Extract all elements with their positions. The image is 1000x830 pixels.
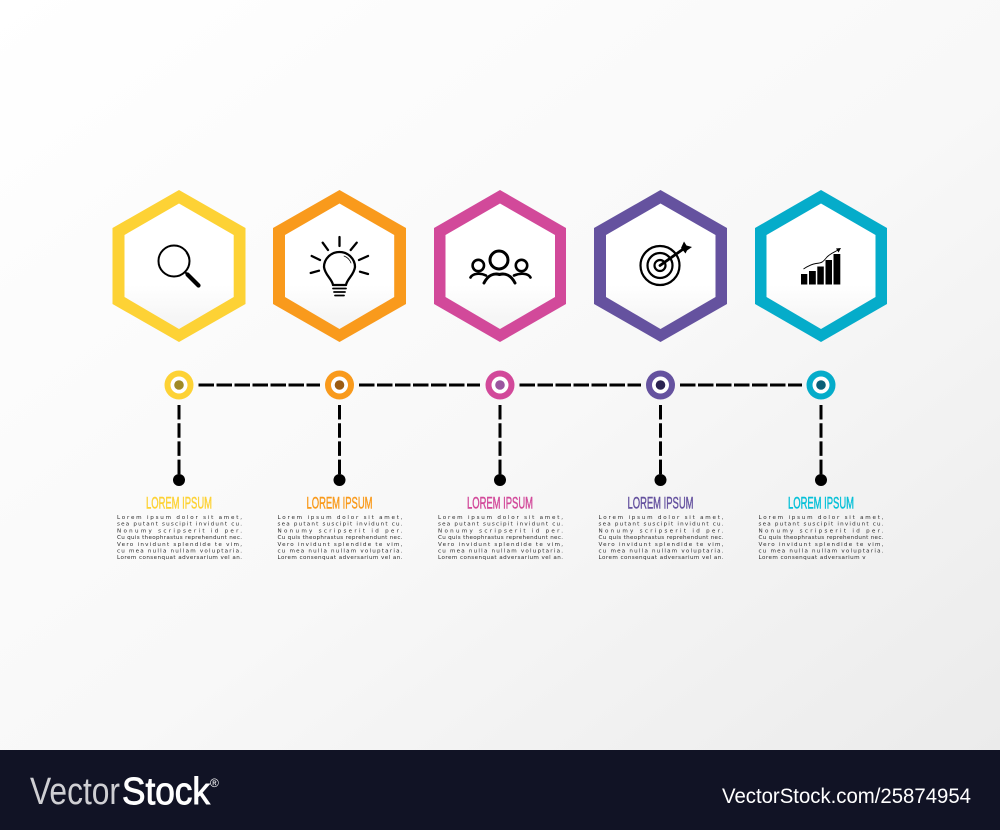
heading: step 2: LOREM IPSUM <box>306 494 372 512</box>
body text: step 2: Nonumy scripserit id per. <box>278 528 403 534</box>
drop line with pin 5 <box>815 405 827 486</box>
icon: light bulb <box>311 237 368 296</box>
body text: step 1: Vero invidunt splendide te vim, <box>117 542 242 548</box>
drop line with pin 1 <box>173 405 185 486</box>
timeline node 4 <box>646 370 675 400</box>
body text: step 1: Lorem ipsum dolor sit amet, <box>117 515 242 521</box>
body text: step 3: sea putant suscipit invidunt cu. <box>438 522 563 528</box>
panel: step 4 hexagon <box>594 190 727 342</box>
body text: step 1: Cu quis theophrastus reprehendunt nec. <box>117 535 242 541</box>
body text: step 2: Lorem ipsum dolor sit amet, <box>278 515 403 521</box>
footer bar <box>0 750 1000 830</box>
body text: step 3 <box>438 515 563 561</box>
body text: step 4: Vero invidunt splendide te vim, <box>598 542 724 548</box>
body text: step 5: Cu quis theophrastus reprehendunt nec. <box>758 535 884 541</box>
drop line with pin 2 <box>334 405 346 486</box>
body text: step 3: Lorem ipsum dolor sit amet, <box>438 515 563 521</box>
drop line with pin 4 <box>654 405 666 486</box>
body text: step 5: Nonumy scripserit id per. <box>758 528 884 534</box>
body text: step 3: Nonumy scripserit id per. <box>438 528 563 534</box>
body text: step 4: cu mea nulla nullam voluptaria. <box>598 548 724 554</box>
body text: step 1: Nonumy scripserit id per. <box>117 528 242 534</box>
timeline node 3 <box>486 370 514 400</box>
body text: step 4: sea putant suscipit invidunt cu. <box>598 522 724 528</box>
body text: step 5: Lorem ipsum dolor sit amet, <box>758 515 884 521</box>
body text: step 5: Vero invidunt splendide te vim, <box>758 542 884 548</box>
icon: target with arrow <box>640 242 692 285</box>
body text: step 4: Lorem ipsum dolor sit amet, <box>598 515 724 521</box>
heading: step 3: LOREM IPSUM <box>467 494 533 512</box>
body text: step 5 <box>758 515 884 561</box>
body text: step 1: cu mea nulla nullam voluptaria. <box>117 548 242 554</box>
footer logo: Vector <box>30 771 120 813</box>
footer logo: ® <box>210 776 219 790</box>
body text: step 5: Lorem consenquat adversarium v <box>758 555 866 561</box>
body text: step 4: Lorem consenquat adversarium vel an. <box>598 555 724 561</box>
timeline connector: horizontal dashes <box>198 384 802 386</box>
panel: step 1 hexagon <box>112 190 246 342</box>
footer logo: Stock <box>122 771 211 813</box>
heading: step 4: LOREM IPSUM <box>628 494 694 512</box>
body text: step 5: sea putant suscipit invidunt cu. <box>758 522 884 528</box>
body text: step 2: Vero invidunt splendide te vim, <box>278 542 403 548</box>
drop line with pin 3 <box>494 405 506 486</box>
body text: step 2: Lorem consenquat adversarium vel an. <box>278 555 403 561</box>
panel: step 5 hexagon <box>755 190 887 342</box>
body text: step 2: sea putant suscipit invidunt cu. <box>278 522 403 528</box>
text block: step 5 <box>758 494 884 561</box>
body text: step 3: Cu quis theophrastus reprehendunt nec. <box>438 535 563 541</box>
text block: step 4 <box>598 494 724 561</box>
panel: step 2 hexagon <box>273 190 406 342</box>
body text: step 2: cu mea nulla nullam voluptaria. <box>278 548 403 554</box>
icon: group of people <box>470 251 530 283</box>
footer logo <box>30 771 219 813</box>
timeline node 2 <box>325 370 354 400</box>
text block: step 3 <box>438 494 563 561</box>
body text: step 1 <box>117 515 242 561</box>
body text: step 4: Cu quis theophrastus reprehendunt nec. <box>598 535 724 541</box>
text block: step 1 <box>117 494 242 561</box>
icon: magnifying glass <box>158 246 198 286</box>
heading: step 1: LOREM IPSUM <box>146 494 212 512</box>
timeline node 1 <box>164 370 194 400</box>
body text: step 2 <box>278 515 403 561</box>
body text: step 5: cu mea nulla nullam voluptaria. <box>758 548 884 554</box>
body text: step 3: Lorem consenquat adversarium vel an. <box>438 555 563 561</box>
body text: step 1: Lorem consenquat adversarium vel an. <box>117 555 242 561</box>
footer image id: VectorStock.com/25874954 <box>722 785 971 808</box>
heading: step 5: LOREM IPSUM <box>788 494 854 512</box>
timeline node 5 <box>806 370 836 400</box>
body text: step 4: Nonumy scripserit id per. <box>598 528 724 534</box>
body text: step 4 <box>598 515 724 561</box>
body text: step 3: Vero invidunt splendide te vim, <box>438 542 563 548</box>
body text: step 2: Cu quis theophrastus reprehendunt nec. <box>278 535 403 541</box>
body text: step 1: sea putant suscipit invidunt cu. <box>117 522 242 528</box>
body text: step 3: cu mea nulla nullam voluptaria. <box>438 548 563 554</box>
panel: step 3 hexagon <box>434 190 566 342</box>
text block: step 2 <box>278 494 403 561</box>
icon: growth bar chart <box>801 248 841 284</box>
